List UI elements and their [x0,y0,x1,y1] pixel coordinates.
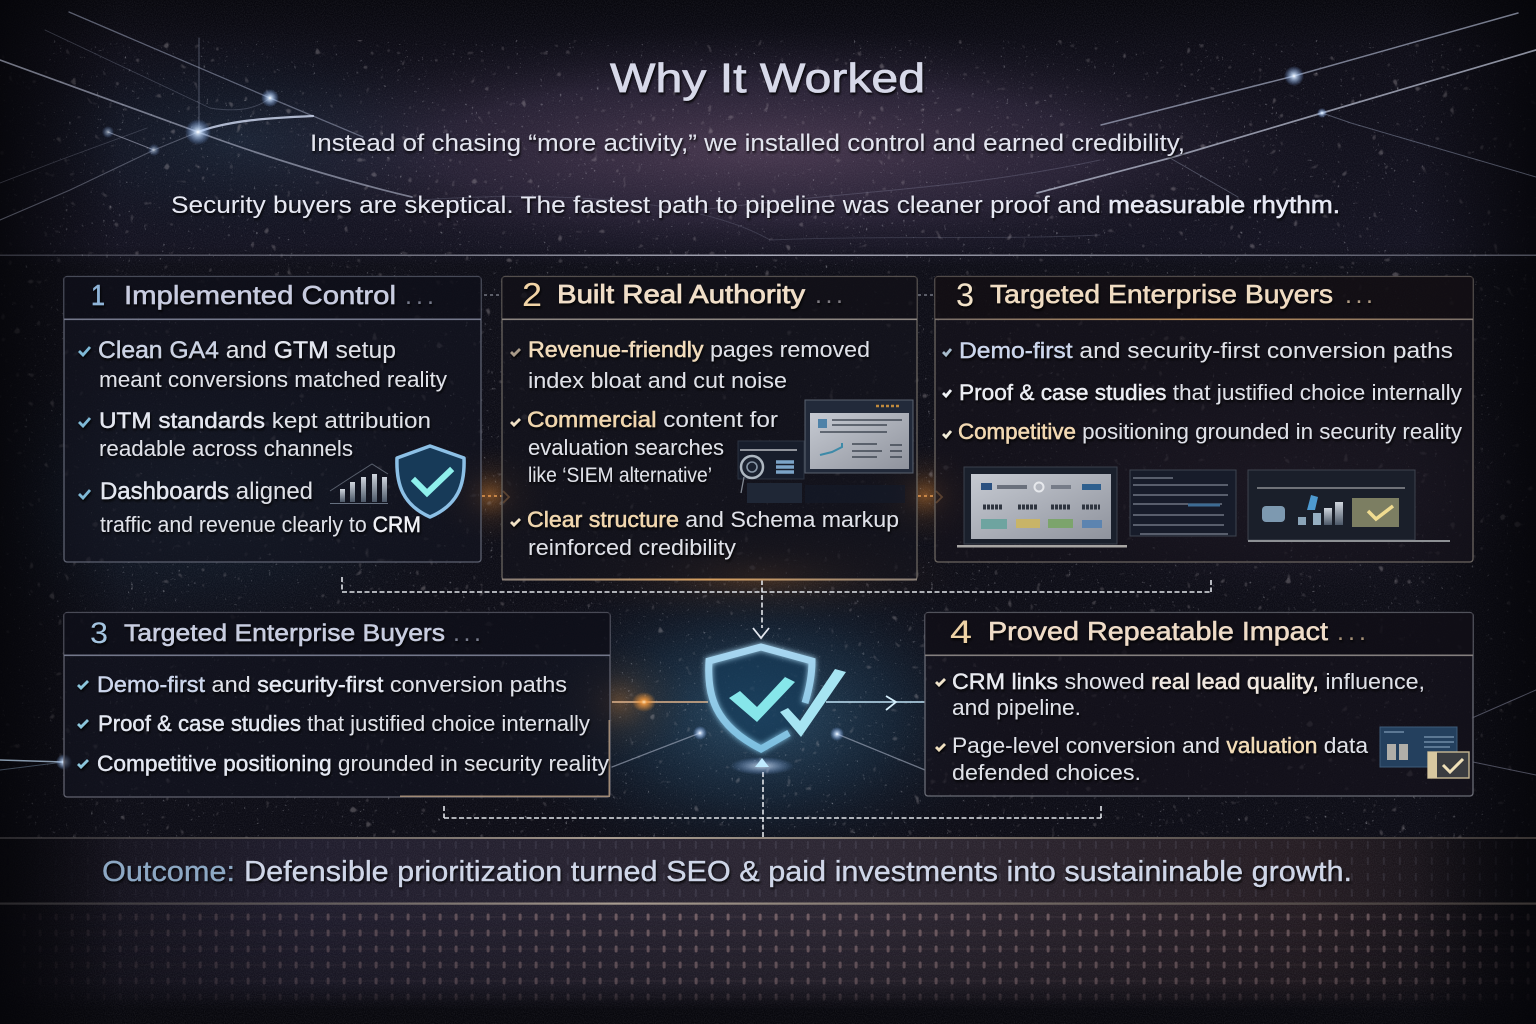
intro text: Instead of chasing “more activity,” we installed control and earned credibility, [310,130,1185,157]
header rule [0,254,1536,256]
checklist: impact items: Page-level conversion and valuation data [952,733,1368,758]
heading: Targeted Enterprise Buyers: 3 [90,617,108,650]
illustration: laptop with logos [957,467,1127,548]
checklist: authority items: Clear structure and Schema markup [527,507,899,532]
connectors between panels [342,295,1211,838]
heading: Built Real Authority: Built Real Authority [557,279,805,309]
heading: Proved Repeatable Impact: ... [1337,618,1366,646]
checklist: buyer items: Demo-first and security-first conversion paths [97,672,567,697]
decorative constellation streaks [0,12,1536,775]
checklist: authority items: index bloat and cut noise [528,368,787,393]
panel 2: Built Real Authority [502,276,917,580]
heading: Implemented Control: ... [405,282,434,310]
checklist: buyer items: Competitive positioning grounded in security reality [958,419,1463,444]
heading: Implemented Control: 1 [91,280,105,312]
heading: Implemented Control: Implemented Control [124,280,396,310]
checklist: control items: Clean GA4 and GTM setup [98,337,396,364]
checklist: impact items: defended choices. [952,760,1141,785]
central shield with double check [708,646,846,750]
checklist: control items: meant conversions matched reality [99,367,448,392]
heading: Proved Repeatable Impact [950,614,1366,650]
checklist: authority items: like ‘SIEM alternative’ [528,464,712,487]
illustration: analytics panel with check [1248,470,1450,542]
heading: Targeted Enterprise Buyers: Targeted Enterprise Buyers [990,279,1333,309]
intro text [171,130,1340,219]
outcome statement: Outcome: [102,856,235,888]
checklist: control items: UTM standards kept attribution [99,408,431,433]
checklist: control items: Dashboards aligned [100,478,313,505]
illustration: data table panel [1130,470,1236,536]
heading: Built Real Authority: 2 [522,276,542,313]
heading: Implemented Control [91,280,434,312]
outcome band [0,837,1536,1006]
panel 1: Implemented Control [64,276,481,562]
checklist: authority items: evaluation searches [528,435,724,460]
checklist: authority items: Revenue-friendly pages removed [528,337,870,362]
illustration: documents and magnifier [738,400,913,503]
panel 3: Targeted Enterprise Buyers (top) [935,276,1473,562]
heading: Targeted Enterprise Buyers [956,277,1373,313]
checklist: buyer items: Competitive positioning grounded in security reality [97,751,610,776]
heading: Targeted Enterprise Buyers: Targeted Enterprise Buyers [124,620,445,647]
panel 3b: Targeted Enterprise Buyers (lower) [64,612,610,797]
heading: Targeted Enterprise Buyers: ... [1345,281,1373,309]
icon: bar chart [330,464,388,504]
checklist: impact items: and pipeline. [952,695,1081,720]
outcome statement: Defensible prioritization turned SEO & paid investments into sustaininable growth. [244,856,1352,888]
heading: Built Real Authority [522,276,843,313]
heading: Targeted Enterprise Buyers [90,617,481,650]
heading: Built Real Authority: ... [815,281,843,309]
heading: Proved Repeatable Impact: Proved Repeatable Impact [988,616,1329,646]
checklist: impact items [936,669,1425,785]
checklist: buyer items: Proof & case studies that justified choice internally [98,711,591,736]
heading: Targeted Enterprise Buyers: ... [453,619,481,647]
panel 4: Proved Repeatable Impact [925,612,1473,796]
checklist: buyer items: Demo-first and security-first conversion paths [959,338,1453,363]
intro text: Security buyers are skeptical. The fastest path to pipeline was cleaner proof and measurable rhythm. [171,192,1340,219]
checklist: authority items [511,337,899,560]
icon: shield with check [397,446,464,517]
title: Why It Worked [610,55,925,101]
checklist: buyer items: Proof & case studies that justified choice internally [959,380,1463,405]
checklist: authority items: Commercial content for [527,407,779,432]
icon: dashboard with check [1380,727,1469,778]
checklist: control items [79,337,448,537]
checklist: control items: readable across channels [99,436,353,461]
checklist: impact items: CRM links showed real lead quality, influence, [952,669,1425,694]
checklist: buyer items [78,672,610,776]
heading: Targeted Enterprise Buyers: 3 [956,277,974,313]
checklist: buyer items [943,338,1463,444]
checklist: authority items: reinforced credibility [528,535,737,560]
heading: Proved Repeatable Impact: 4 [950,614,972,650]
checklist: control items: traffic and revenue clearly to CRM [100,512,421,537]
